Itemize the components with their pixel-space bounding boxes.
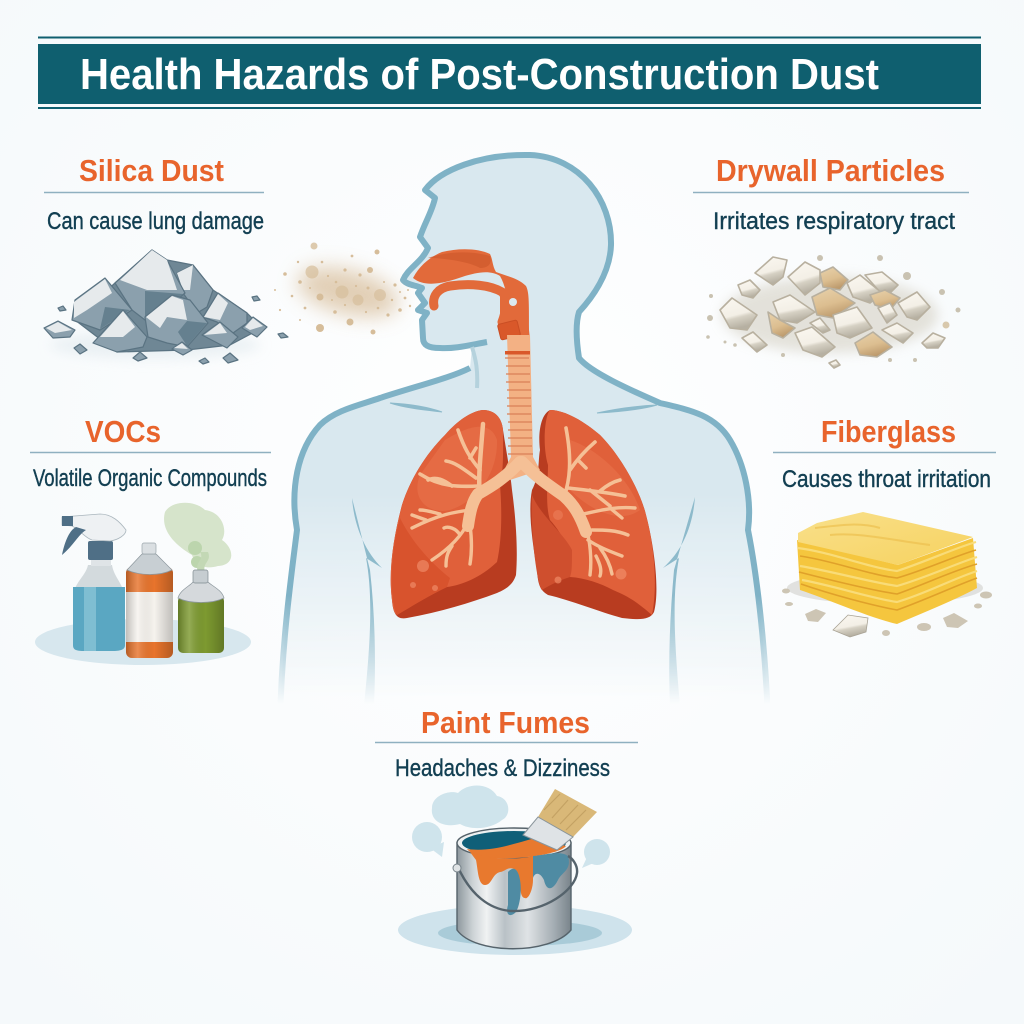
right lung <box>530 410 656 619</box>
green can <box>178 596 224 653</box>
can handle <box>457 856 577 911</box>
dust cloud <box>274 242 411 334</box>
icon: drywall rubble pile <box>706 255 960 368</box>
heading: paint fumes: Paint Fumes <box>421 705 590 740</box>
description: VOCs: Volatile Organic Compounds <box>33 465 267 492</box>
heading: silica dust: Silica Dust <box>79 153 224 188</box>
spray bottle <box>73 565 125 651</box>
debris <box>833 615 868 637</box>
paint brush <box>538 789 597 837</box>
title: Health Hazards of Post-Construction Dust <box>80 50 879 99</box>
fume clouds <box>412 785 610 868</box>
fumes <box>164 503 231 572</box>
orange spray can <box>126 567 173 658</box>
heading: drywall particles: Drywall Particles <box>716 153 945 188</box>
description: paint fumes: Headaches & Dizziness <box>395 755 610 782</box>
nasal cavity and throat <box>413 249 530 340</box>
icon: solvent bottles and spray <box>35 503 251 665</box>
icon: paint can with brush <box>398 785 632 955</box>
teal drips <box>533 853 569 888</box>
larynx <box>497 320 521 340</box>
heading: fiberglass: Fiberglass <box>821 414 956 449</box>
icon: fiberglass insulation stack <box>782 512 992 637</box>
title banner <box>38 36 981 109</box>
left lung <box>391 410 517 618</box>
description: drywall particles: Irritates respiratory tract <box>713 208 955 235</box>
human body silhouette <box>280 155 768 720</box>
heading: VOCs: VOCs <box>85 414 161 449</box>
orange drips <box>470 852 533 898</box>
trachea and bronchial trees <box>412 335 635 576</box>
icon: silica rock pile <box>44 250 288 364</box>
description: silica dust: Can cause lung damage <box>47 208 264 235</box>
description: fiberglass: Causes throat irritation <box>782 466 991 493</box>
